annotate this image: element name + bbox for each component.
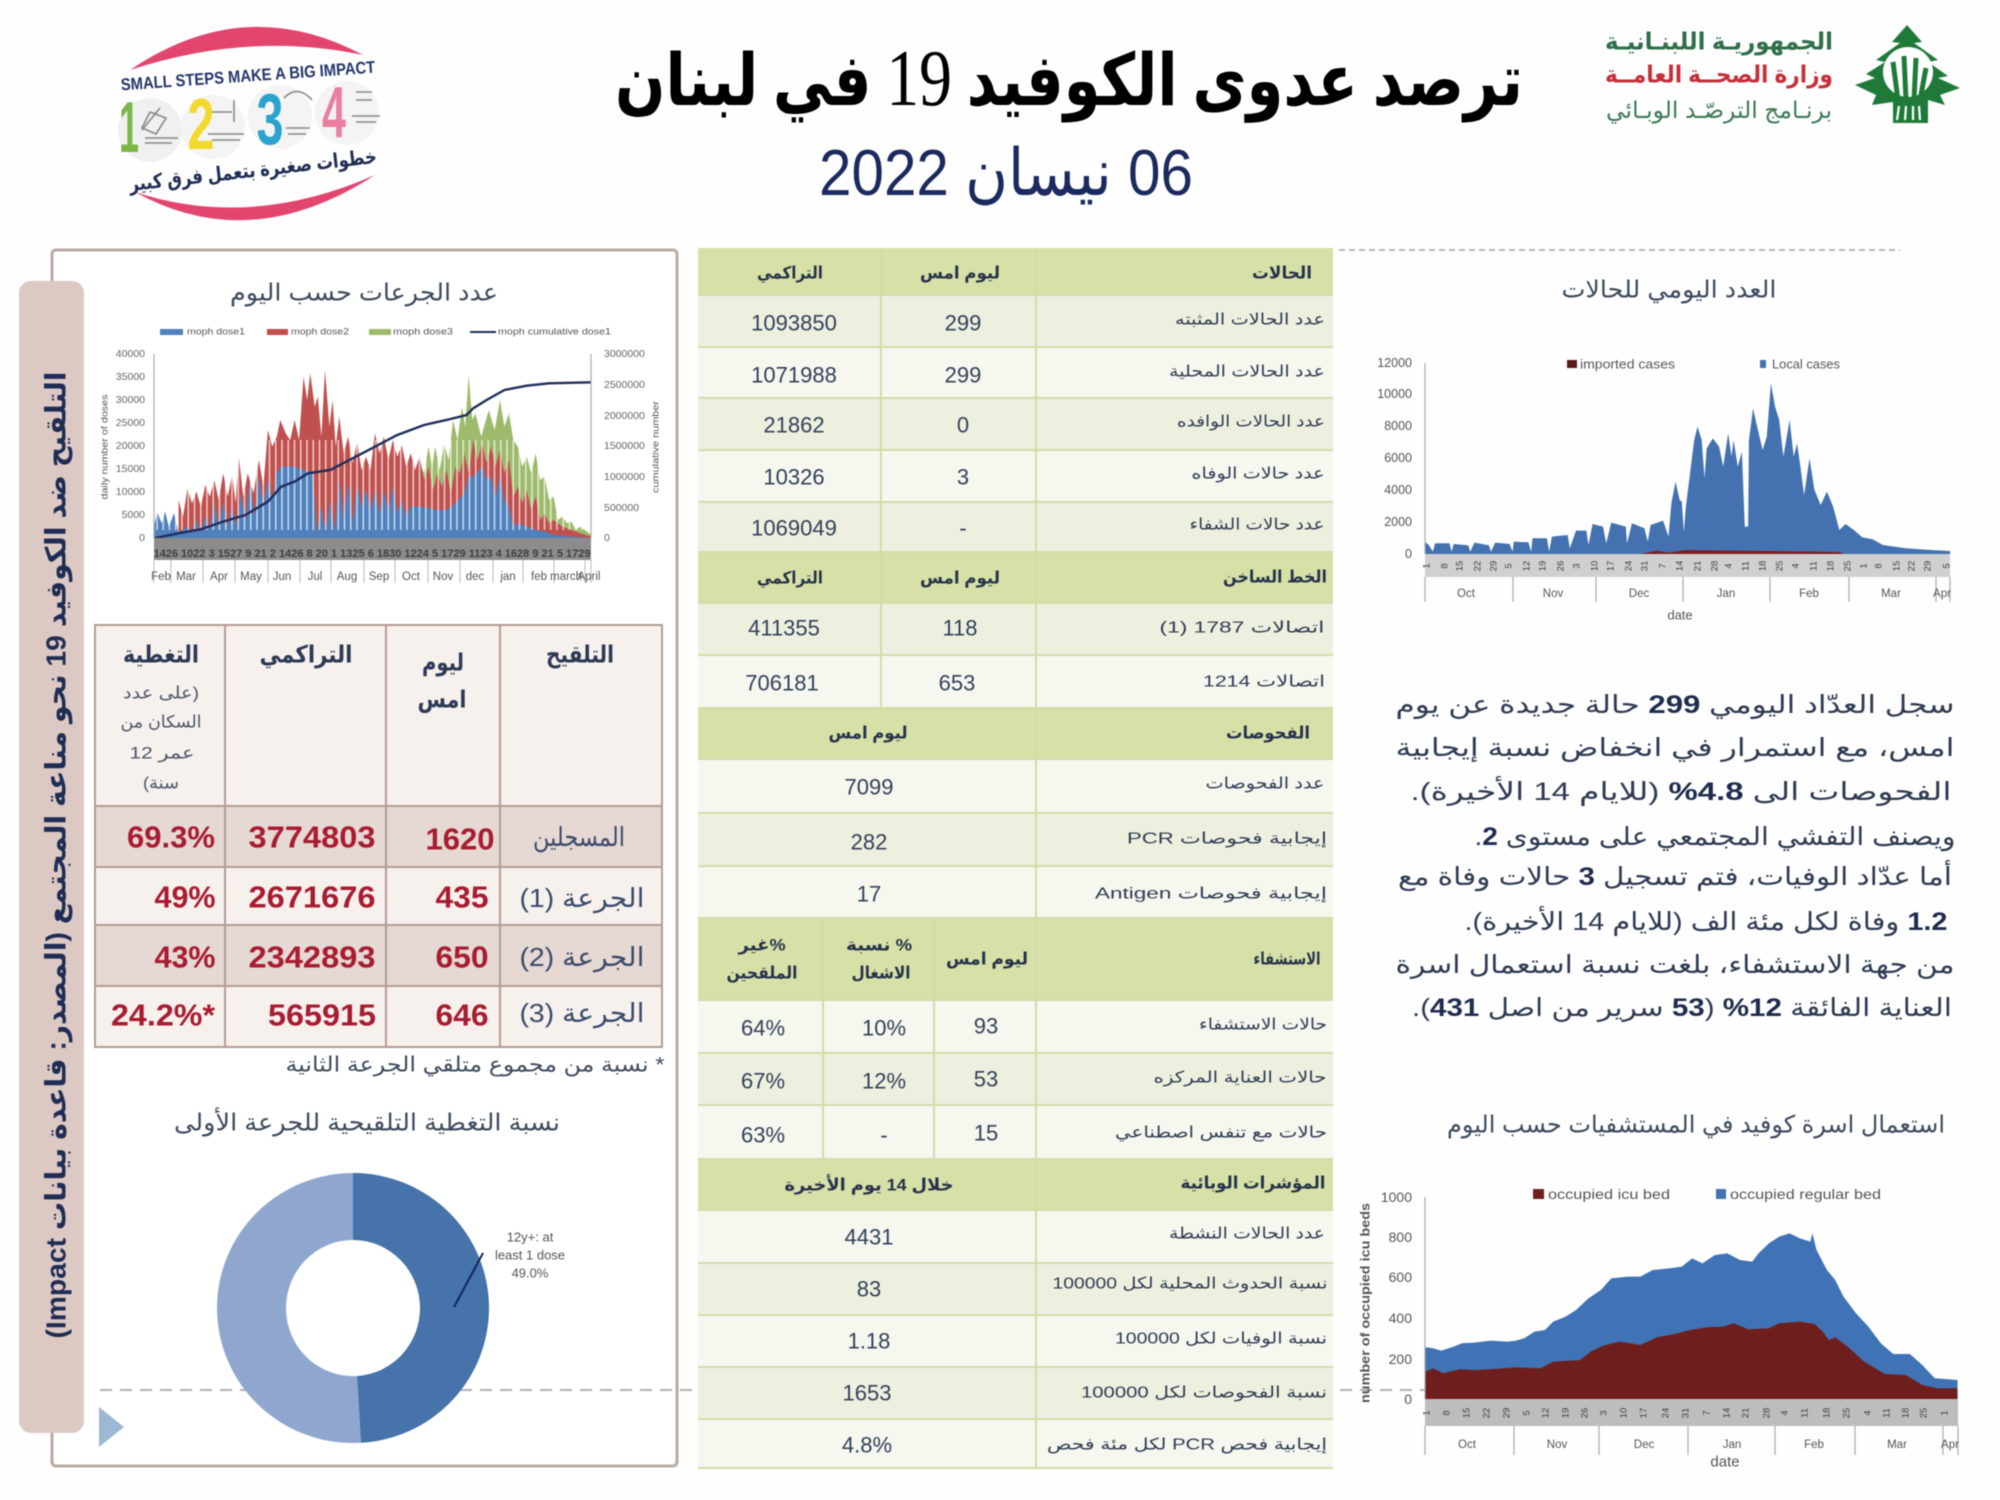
text block: daily summary: العناية الفائقة 12% (53 سرير من اصل 431).: [1412, 994, 1952, 1022]
chart: coverage donut: 49.0%: [512, 1266, 549, 1280]
chart: daily doses: Mar: [176, 571, 196, 583]
chart: daily doses: 15000: [116, 463, 145, 475]
row: dose 1: 435: [436, 880, 488, 914]
chart: daily doses: Nov: [433, 571, 453, 583]
chart: hospital beds: Nov: [1547, 1439, 1567, 1451]
logo: small steps make a big impact: 3: [256, 80, 284, 160]
chart: daily cases: 5: [1942, 563, 1952, 569]
section: hotline: 653: [939, 670, 975, 696]
text block: daily summary: من جهة الاستشفاء، بلغت نسبة استعمال اسرة: [1396, 951, 1954, 980]
chart: daily cases: 17: [1606, 561, 1616, 571]
logo: ministry of public health: وزارة الصحــة العامــة: [1605, 62, 1833, 88]
chart: daily doses: 500000: [604, 502, 639, 514]
text block: daily summary: الفحوصات الى 4.8% (للايام 14 الأخيرة).: [1410, 775, 1952, 806]
text block: daily summary: ويصنف التفشي المجتمعي على مستوى 2.: [1474, 823, 1956, 852]
row: dose 3: [111, 998, 644, 1032]
legend: beds: occupied regular bed: [1730, 1186, 1881, 1202]
section: epidemiological indicators: 1.18: [848, 1328, 890, 1354]
text block: daily summary: امس، مع استمرار في انخفاض نسبة إيجابية: [1396, 734, 1954, 763]
chart: daily doses: 25000: [116, 417, 145, 429]
chart: daily doses: 10000: [116, 486, 145, 498]
chart: daily doses: 2000000: [604, 410, 645, 422]
chart: daily cases: 8: [1440, 563, 1450, 569]
row: dose 2: 2342893: [248, 940, 376, 974]
section: hospitalisation: [726, 936, 1327, 1148]
chart: daily cases: 10000: [1377, 387, 1412, 401]
chart: hospital beds: Oct: [1458, 1439, 1477, 1451]
section: cases: 1069049: [751, 516, 837, 540]
chart: hospital beds: 17: [1638, 1408, 1650, 1418]
chart: coverage donut: [217, 1173, 565, 1443]
chart: hospital beds: 26: [1580, 1408, 1590, 1418]
chart: hospital beds: 14: [1722, 1408, 1732, 1418]
section: hospitalisation: الملقحين: [726, 964, 798, 984]
chart: daily doses: 1000000: [604, 471, 645, 483]
heading: first dose coverage: نسبة التغطية التلقيحية للجرعة الأولى: [174, 1108, 560, 1136]
heading: daily cases: العدد اليومي للحالات: [1562, 276, 1776, 304]
panel: data table: [698, 248, 1333, 1468]
chart: hospital beds: 3: [1598, 1410, 1610, 1416]
section: hospitalisation: حالات الاستشفاء: [1199, 1016, 1327, 1034]
date: 06 نيسان 2022: [819, 136, 1193, 209]
section: hospitalisation: %غير: [737, 936, 786, 956]
chart: coverage donut: least 1 dose: [495, 1248, 565, 1262]
chart: daily doses: 0: [604, 532, 610, 544]
chart: hospital beds: 0: [1404, 1391, 1412, 1407]
section: hotline: الخط الساخن: [1223, 568, 1327, 588]
chart: hospital beds: 29: [1502, 1408, 1512, 1418]
section: cases: 1093850: [751, 310, 837, 336]
section: tests: الفحوصات: [1226, 724, 1310, 744]
chart: coverage donut: 12y+: at: [507, 1230, 554, 1244]
table: vaccination: [95, 625, 662, 1047]
legend: doses: moph cumulative dose1: [498, 326, 611, 338]
sidebar: vaccination heading: [19, 281, 84, 1433]
icon: triangle marker: [99, 1407, 124, 1447]
chart: daily cases: 11: [1808, 561, 1820, 571]
section: hospitalisation: 63%: [741, 1122, 785, 1148]
section: epidemiological indicators: [784, 1174, 1328, 1458]
section: cases: 3: [957, 464, 969, 490]
chart: daily cases: 29: [1922, 561, 1934, 571]
chart: daily doses: march: [550, 571, 582, 583]
chart: daily doses: Sep: [369, 571, 389, 583]
chart: daily cases: 1: [1858, 563, 1870, 569]
section: hospitalisation: 10%: [862, 1016, 906, 1040]
vaccination table header: ليوم: [422, 650, 464, 676]
chart: daily cases: 29: [1488, 561, 1500, 571]
chart: daily cases: 22: [1906, 561, 1918, 571]
legend: doses: moph dose1: [187, 326, 245, 338]
chart: daily cases: 12000: [1377, 356, 1412, 370]
section: hotline: [745, 568, 1327, 696]
row: registered: 3774803: [248, 820, 376, 854]
chart: daily doses: feb: [531, 571, 547, 583]
chart: hospital beds: 4: [1862, 1410, 1874, 1416]
chart: daily cases: date: [1667, 608, 1693, 622]
logo: ministry of public health: الجمهوريـة اللبنـانيـة: [1605, 28, 1833, 56]
section: epidemiological indicators: 1653: [843, 1380, 891, 1406]
vaccination table header: السكان من: [120, 712, 202, 732]
chart: hospital beds: 18: [1900, 1408, 1912, 1418]
section: hospitalisation: الاستشفاء: [1254, 950, 1320, 968]
sidebar: vaccination heading: التلقيح ضد الكوفيد 19 نحو مناعة المجتمع (المصدر: قاعدة بيانات Impact): [40, 371, 72, 1339]
chart: daily cases: Apr: [1933, 588, 1951, 600]
chart: daily doses: Apr: [210, 571, 228, 583]
chart: daily cases: 21: [1692, 561, 1704, 571]
chart: hospital beds: 400: [1389, 1310, 1412, 1326]
section: hotline: اتصالات 1787 (1): [1160, 620, 1324, 636]
legend: doses: moph dose2: [291, 326, 349, 338]
legend: doses: [160, 326, 611, 338]
chart: hospital beds: 10: [1618, 1408, 1630, 1418]
section: cases: عدد حالات الوفاه: [1192, 466, 1324, 484]
legend: cases: imported cases: [1580, 356, 1676, 372]
chart: daily cases: 7: [1658, 563, 1668, 569]
chart: hospital beds: Feb: [1804, 1439, 1824, 1451]
chart: hospital beds: 1000: [1381, 1189, 1412, 1205]
section: cases: [751, 264, 1325, 540]
logo: small steps make a big impact: 1: [119, 88, 139, 168]
row: dose 2: 43%: [154, 940, 216, 974]
section: epidemiological indicators: نسبة الوفيات لكل 100000: [1115, 1330, 1327, 1348]
chart: daily cases: 26: [1556, 561, 1566, 571]
chart: daily doses: jan: [499, 571, 516, 583]
section: hotline: 118: [942, 616, 978, 640]
section: hospitalisation: ليوم امس: [946, 950, 1028, 970]
chart: daily cases: 0: [1405, 547, 1412, 561]
chart: daily cases: 15: [1454, 561, 1466, 571]
section: cases: عدد الحالات المحلية: [1169, 364, 1325, 380]
chart: daily cases: 22: [1472, 561, 1484, 571]
section: epidemiological indicators: 4.8%: [842, 1432, 892, 1458]
title: ترصد عدوى الكوفيد 19 في لبنان: [615, 35, 1523, 123]
chart: daily cases: 18: [1826, 561, 1836, 571]
heading: doses per day: عدد الجرعات حسب اليوم: [230, 280, 498, 306]
section: hospitalisation: 64%: [741, 1016, 785, 1040]
chart: daily cases: 8: [1874, 563, 1884, 569]
row: dose 1: 49%: [154, 880, 216, 914]
section: hospitalisation: % نسبة: [846, 936, 912, 954]
chart: daily cases: 24: [1624, 561, 1634, 571]
chart: hospital beds: 7: [1702, 1410, 1712, 1416]
logo: small steps make a big impact: خطوات صغيرة بتعمل فرق كبير: [127, 146, 378, 196]
section: hospitalisation: حالات مع تنفس اصطناعي: [1115, 1124, 1327, 1142]
chart: daily cases: 31: [1640, 561, 1650, 571]
text block: daily summary: 1.2 وفاة لكل مئة الف (للايام 14 الأخيرة).: [1464, 905, 1948, 937]
chart: daily doses: daily number of doses: [100, 394, 110, 500]
chart: daily doses: May: [240, 571, 262, 583]
section: tests: إيجابية فحوصات Antigen: [1095, 886, 1327, 904]
chart: daily doses: dec: [466, 571, 485, 583]
row: registered: المسجلين: [533, 822, 625, 853]
chart: hospital beds: 8: [1442, 1410, 1452, 1416]
chart: daily doses: April: [577, 571, 601, 583]
chart: daily doses: 30000: [116, 394, 145, 406]
chart: daily doses: 0: [139, 532, 145, 544]
row: dose 1: الجرعة (1): [520, 883, 644, 914]
section: cases: 1071988: [751, 362, 837, 388]
section: hospitalisation: 93: [974, 1014, 998, 1038]
chart: daily doses: cumulative number: [650, 401, 662, 493]
legend: cases: [1567, 356, 1840, 372]
vaccination table header: [120, 642, 614, 792]
chart: daily cases: 1: [1422, 563, 1432, 569]
vaccination table header: سنة): [143, 774, 179, 792]
legend: beds: occupied icu bed: [1548, 1186, 1670, 1202]
chart: hospital beds: 11: [1800, 1408, 1810, 1418]
section: hotline: 706181: [745, 670, 819, 696]
section: cases: 21862: [763, 412, 825, 438]
section: epidemiological indicators: خلال 14 يوم الأخيرة: [784, 1174, 954, 1196]
chart: daily doses: 40000: [116, 348, 145, 360]
text block: daily summary: [1396, 691, 1956, 1022]
logo: small steps make a big impact: 4: [322, 73, 346, 153]
chart: daily doses: 2500000: [604, 379, 645, 391]
chart: daily doses: [100, 326, 662, 583]
section: hospitalisation: 67%: [741, 1068, 785, 1094]
chart: daily doses: 3000000: [604, 348, 645, 360]
chart: daily cases: Oct: [1457, 588, 1476, 600]
chart: daily doses: 5000: [122, 509, 145, 521]
chart: daily doses: 1426 1022 3 1527 9 21 2 1426 8 20 1 1325 6 1830 1224 5 1729 1123 4 1628 9 21 5 1729: [154, 548, 590, 560]
chart: daily doses: 1500000: [604, 440, 645, 452]
chart: daily cases: 18: [1758, 561, 1768, 571]
row: dose 2: الجرعة (2): [520, 942, 644, 973]
chart: hospital beds: 600: [1389, 1269, 1412, 1285]
row: dose 1: [154, 880, 644, 914]
chart: hospital beds: Mar: [1887, 1439, 1907, 1451]
section: hospitalisation: 53: [974, 1066, 998, 1092]
chart: daily doses: Aug: [337, 571, 357, 583]
vaccination table header: التغطية: [123, 642, 199, 668]
row: registered: 69.3%: [127, 820, 215, 854]
panel: vaccination: [19, 250, 700, 1466]
section: hospitalisation: الاشغال: [852, 964, 910, 982]
chart: hospital beds: 12: [1540, 1408, 1552, 1418]
vaccination table header: التلقيح: [546, 642, 614, 668]
text block: daily summary: سجل العدّاد اليومي 299 حالة جديدة عن يوم: [1396, 691, 1954, 719]
chart: daily cases: 3: [1572, 563, 1582, 569]
logo: ministry of public health: برنـامج الترصّـد الوبـائي: [1606, 97, 1832, 124]
section: hospitalisation: 12%: [862, 1068, 906, 1094]
row: dose 2: 650: [436, 940, 488, 974]
vaccination table header: عمر 12: [130, 744, 194, 762]
row: registered: 1620: [426, 822, 494, 856]
chart: daily cases: 2000: [1384, 515, 1412, 529]
chart: hospital beds: 25: [1842, 1408, 1852, 1418]
chart: daily doses: Jul: [308, 571, 322, 583]
chart: hospital beds: 25: [1918, 1408, 1930, 1418]
section: cases: 299: [945, 310, 981, 336]
section: hotline: التراكمي: [757, 568, 823, 588]
section: epidemiological indicators: إيجابية فحص PCR لكل مئة فحص: [1047, 1436, 1327, 1454]
chart: daily cases: 12: [1522, 561, 1532, 571]
section: cases: عدد الحالات الوافده: [1177, 414, 1325, 432]
section: epidemiological indicators: عدد الحالات النشطة: [1169, 1226, 1325, 1242]
chart: daily cases: Dec: [1629, 588, 1649, 600]
chart: hospital beds: 31: [1680, 1408, 1692, 1418]
chart: hospital beds: 4: [1780, 1410, 1790, 1416]
logo: ministry of public health: [1605, 25, 1960, 124]
section: epidemiological indicators: نسبة الفحوصات لكل 100000: [1081, 1384, 1327, 1402]
section: cases: 0: [957, 412, 969, 438]
chart: daily doses: Jun: [273, 571, 291, 583]
chart: daily cases: 14: [1674, 561, 1686, 571]
row: dose 2: [154, 940, 644, 974]
chart: daily cases: 28: [1710, 561, 1720, 571]
chart: hospital beds: 1: [1940, 1410, 1950, 1416]
chart: hospital beds: 19: [1560, 1408, 1572, 1418]
chart: hospital beds: 28: [1762, 1408, 1772, 1418]
vaccination table header: التراكمي: [260, 642, 352, 668]
row: registered: [127, 820, 625, 856]
row: dose 3: 24.2%*: [111, 998, 216, 1032]
chart: hospital beds: 800: [1389, 1229, 1412, 1245]
chart: hospital beds: 5: [1522, 1410, 1532, 1416]
chart: hospital beds: 15: [1462, 1408, 1472, 1418]
chart: hospital beds: Jan: [1723, 1439, 1741, 1451]
chart: hospital beds: 1: [1422, 1410, 1432, 1416]
chart: daily cases: Feb: [1799, 588, 1819, 600]
chart: daily cases: 10: [1590, 561, 1600, 571]
chart: daily doses: Feb: [151, 571, 171, 583]
section: tests: 282: [851, 830, 887, 854]
chart: hospital beds: 200: [1389, 1351, 1412, 1367]
chart: daily doses: 35000: [116, 371, 145, 383]
logo: small steps make a big impact: 2: [188, 85, 214, 165]
chart: hospital beds: date: [1710, 1454, 1740, 1470]
chart: hospital beds: 21: [1740, 1408, 1752, 1418]
section: cases: التراكمي: [757, 264, 823, 284]
section: cases: عدد الحالات المثبته: [1175, 312, 1325, 328]
section: cases: 10326: [763, 464, 825, 490]
chart: hospital beds: 18: [1822, 1408, 1832, 1418]
section: cases: ليوم امس: [920, 264, 1000, 284]
section: tests: ليوم امس: [828, 724, 908, 744]
section: cases: 299: [945, 362, 981, 388]
section: tests: عدد الفحوصات: [1206, 776, 1324, 794]
chart: daily cases: 25: [1842, 561, 1854, 571]
section: tests: 17: [857, 882, 881, 906]
logo: small steps make a big impact: SMALL STEPS MAKE A BIG IMPACT: [120, 58, 376, 94]
chart: daily cases: 25: [1774, 561, 1786, 571]
section: hotline: ليوم امس: [920, 568, 1000, 588]
section: cases: الحالات: [1252, 264, 1312, 282]
chart: daily cases: Nov: [1543, 588, 1563, 600]
chart: daily cases: 4: [1724, 563, 1734, 569]
legend: beds: [1533, 1186, 1881, 1202]
chart: hospital beds: number of occupied icu beds: [1358, 1203, 1372, 1403]
section: tests: 7099: [845, 774, 893, 800]
section: hotline: 411355: [748, 616, 820, 640]
legend: cases: Local cases: [1772, 356, 1840, 372]
chart: daily cases: 4: [1790, 563, 1802, 569]
vaccination table header: (على عدد: [123, 684, 199, 702]
logo: small steps make a big impact: [118, 27, 380, 220]
chart: daily cases: 8000: [1384, 419, 1412, 433]
section: hospitalisation: حالات العناية المركزه: [1154, 1070, 1326, 1088]
chart: hospital beds: [1358, 1186, 1959, 1470]
chart: daily cases: [1377, 356, 1952, 622]
heading: hospital beds: استعمال اسرة كوفيد في المستشفيات حسب اليوم: [1447, 1112, 1945, 1138]
footnote: * نسبة من مجموع متلقي الجرعة الثانية: [286, 1054, 664, 1076]
chart: daily cases: 19: [1538, 561, 1548, 571]
chart: daily cases: 15: [1892, 561, 1902, 571]
chart: daily cases: Mar: [1881, 588, 1901, 600]
section: cases: -: [959, 516, 967, 540]
chart: daily doses: Oct: [402, 571, 421, 583]
section: epidemiological indicators: 4431: [845, 1224, 893, 1250]
section: hotline: اتصالات 1214: [1203, 674, 1325, 690]
chart: hospital beds: 24: [1660, 1408, 1672, 1418]
section: tests: إيجابية فحوصات PCR: [1127, 830, 1327, 848]
text block: daily summary: أما عدّاد الوفيات، فتم تسجيل 3 حالات وفاة مع: [1398, 859, 1952, 892]
row: dose 1: 2671676: [248, 880, 376, 914]
section: hospitalisation: -: [880, 1122, 888, 1148]
row: dose 3: 565915: [268, 998, 376, 1032]
row: dose 3: الجرعة (3): [520, 998, 644, 1029]
chart: hospital beds: Dec: [1634, 1439, 1654, 1451]
section: epidemiological indicators: نسبة الحدوث المحلية لكل 100000: [1052, 1276, 1328, 1294]
vaccination table header: امس: [418, 686, 466, 714]
chart: daily cases: 11: [1740, 561, 1752, 571]
section: tests: [828, 724, 1327, 906]
chart: daily doses: 20000: [116, 440, 145, 452]
chart: daily cases: Jan: [1717, 588, 1735, 600]
section: hospitalisation: 15: [974, 1120, 998, 1146]
chart: hospital beds: 11: [1882, 1408, 1892, 1418]
chart: daily cases: 6000: [1384, 451, 1412, 465]
legend: doses: moph dose3: [393, 326, 453, 338]
row: dose 3: 646: [436, 998, 488, 1032]
section: epidemiological indicators: 83: [857, 1276, 881, 1302]
section: epidemiological indicators: المؤشرات الوبائية: [1180, 1174, 1326, 1194]
chart: hospital beds: Apr: [1941, 1439, 1959, 1451]
chart: daily cases: 5: [1504, 563, 1514, 569]
chart: hospital beds: 22: [1482, 1408, 1492, 1418]
chart: daily cases: 4000: [1384, 483, 1412, 497]
section: cases: عدد حالات الشفاء: [1190, 516, 1324, 534]
